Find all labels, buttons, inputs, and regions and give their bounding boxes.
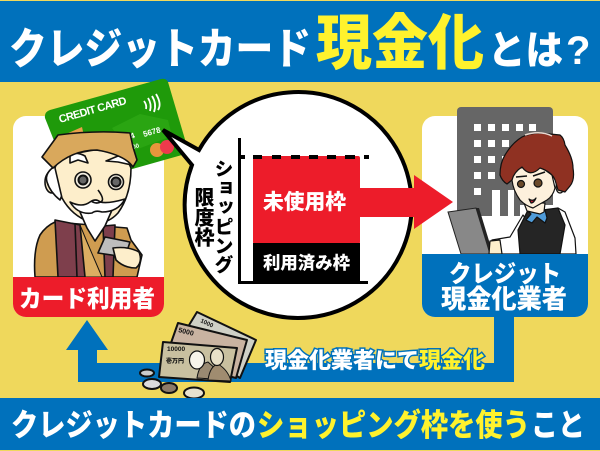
title: ? (566, 29, 590, 73)
icon: credit card (45, 79, 189, 186)
label: cash-out business: 現金化業者 (441, 284, 567, 314)
speech bubble (163, 92, 412, 318)
icon: banknotes and coins (140, 312, 256, 398)
title: クレジットカード (9, 26, 311, 74)
icon: credit card: 00 (132, 143, 141, 151)
limit dashed line (240, 155, 369, 159)
label: card user (13, 277, 164, 317)
icon: banknotes and coins: 10000 (167, 346, 185, 353)
axis label: shopping: ショッピング (212, 159, 233, 274)
icon: banknotes and coins: 壱万円 (166, 357, 184, 365)
bar: used limit (253, 243, 360, 283)
bar: used limit: 利用済み枠 (263, 253, 350, 273)
icon: credit card: 4 (129, 131, 136, 141)
caption: cash-out at business: 現金化 (419, 348, 485, 373)
axis label: limit: 限度枠 (191, 187, 214, 247)
footer text: クレジットカードの (11, 408, 256, 443)
header band (0, 1, 600, 82)
icon: banknotes and coins: 5000 (178, 327, 194, 338)
footer text: ショッピング枠を使う (257, 408, 530, 443)
arrow: unused limit to business (360, 175, 453, 229)
arrow: cash flow back to user (66, 317, 514, 382)
icon: credit card: 5678 (142, 125, 162, 139)
label: cash-out business: クレジット (449, 261, 561, 288)
bar: unused limit: 未使用枠 (263, 190, 346, 214)
bar: unused limit (253, 156, 360, 244)
icon: laptop (448, 208, 493, 254)
panel: cash-out business (422, 107, 588, 317)
chart axes (240, 138, 368, 282)
icon: old man with card (35, 132, 142, 277)
icon: office building (457, 107, 554, 217)
panel: card user (13, 79, 189, 317)
icon: banknotes and coins: 1000 (199, 318, 214, 330)
chart: shopping limit (191, 138, 369, 283)
title (9, 10, 590, 77)
footer band (0, 398, 600, 450)
caption: cash-out at business: 現金化業者にて (265, 348, 419, 373)
title: とは (488, 29, 563, 73)
title: 現金化 (316, 10, 484, 77)
label: card user: カード利用者 (19, 286, 155, 313)
icon: businesswoman (489, 133, 576, 254)
footer text: こと (531, 408, 585, 443)
label: cash-out business (422, 254, 588, 317)
icon: credit card: CREDIT CARD (58, 95, 128, 126)
footer text (11, 408, 585, 443)
